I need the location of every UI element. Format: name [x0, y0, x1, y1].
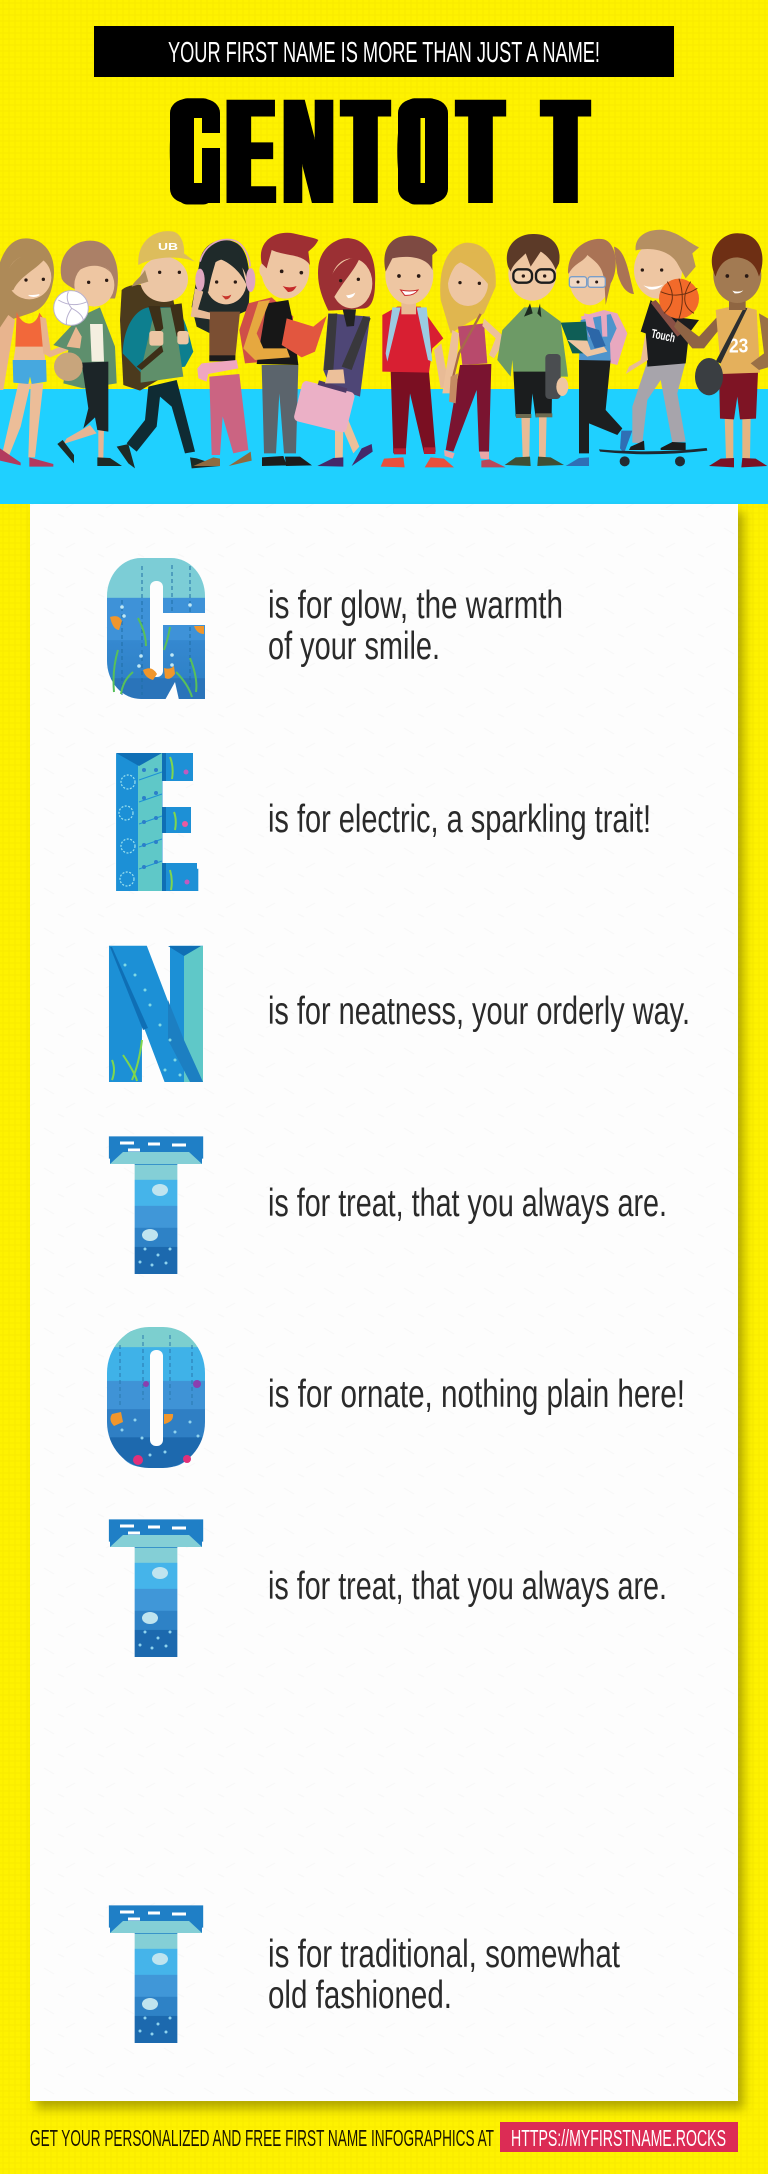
row 7: letter T [110, 1862, 620, 2086]
student 12: boy in basketball jersey: 23 [729, 336, 748, 358]
text: T meaning: is for traditional, somewhat [268, 1933, 620, 1976]
text: T meaning: old fashioned. [268, 1974, 452, 2017]
row 1: letter G [107, 520, 563, 738]
illustration: group of twelve students [0, 230, 768, 468]
student 11: skateboarder with basketball [599, 230, 724, 466]
text: G meaning [268, 584, 563, 668]
row 3: letter N [108, 902, 690, 1124]
title: name: E [230, 69, 271, 236]
student 11: skateboarder with basketball: Touch [650, 327, 676, 345]
row 5: letter O [107, 1289, 685, 1507]
student 8: blonde girl with shoulder bag [440, 243, 506, 467]
text: G meaning: of your smile. [268, 625, 440, 668]
student 2: girl with volleyball [53, 241, 122, 466]
letter T illustration: T [121, 1093, 191, 1317]
title: name: O [403, 67, 442, 235]
row 6: letter T [110, 1476, 667, 1700]
student 6: girl with pink bag [293, 238, 375, 467]
row 4: letter T [110, 1093, 667, 1317]
student 9: boy with glasses and green sweater [497, 234, 568, 466]
row 2: letter E [116, 710, 651, 934]
letter T illustration: T [121, 1476, 191, 1700]
student 4: girl with pink headphones [191, 240, 255, 466]
title: name [170, 67, 584, 236]
title: name: T [347, 69, 384, 236]
text: G meaning: is for glow, the warmth [268, 584, 563, 627]
title: name: N [284, 68, 333, 235]
cyan floor band [0, 389, 768, 504]
letter G illustration: G [117, 520, 195, 738]
student 3: boy with cap and hiking backpack: UB [158, 242, 178, 253]
student 3: boy with cap and hiking backpack [117, 231, 220, 468]
letter E illustration [116, 710, 201, 934]
student 5: boy reading a book [239, 233, 327, 466]
title: name: G [176, 67, 214, 235]
banner: tagline [94, 26, 674, 77]
letter E illustration: E [127, 710, 185, 934]
student 1: girl in orange top [0, 238, 81, 467]
letter N illustration: N [108, 902, 204, 1124]
letter O illustration: O [117, 1289, 195, 1507]
student 10: girl with ponytail and pink backpack [561, 239, 634, 466]
student 7: boy in red t-shirt [381, 236, 454, 467]
text: T meaning [268, 1933, 620, 2017]
title: name: T [547, 69, 584, 236]
title: name: T [462, 69, 499, 236]
letter T illustration: T [121, 1862, 191, 2086]
student 12: boy in basketball jersey [695, 233, 768, 467]
white content panel [30, 504, 738, 2101]
